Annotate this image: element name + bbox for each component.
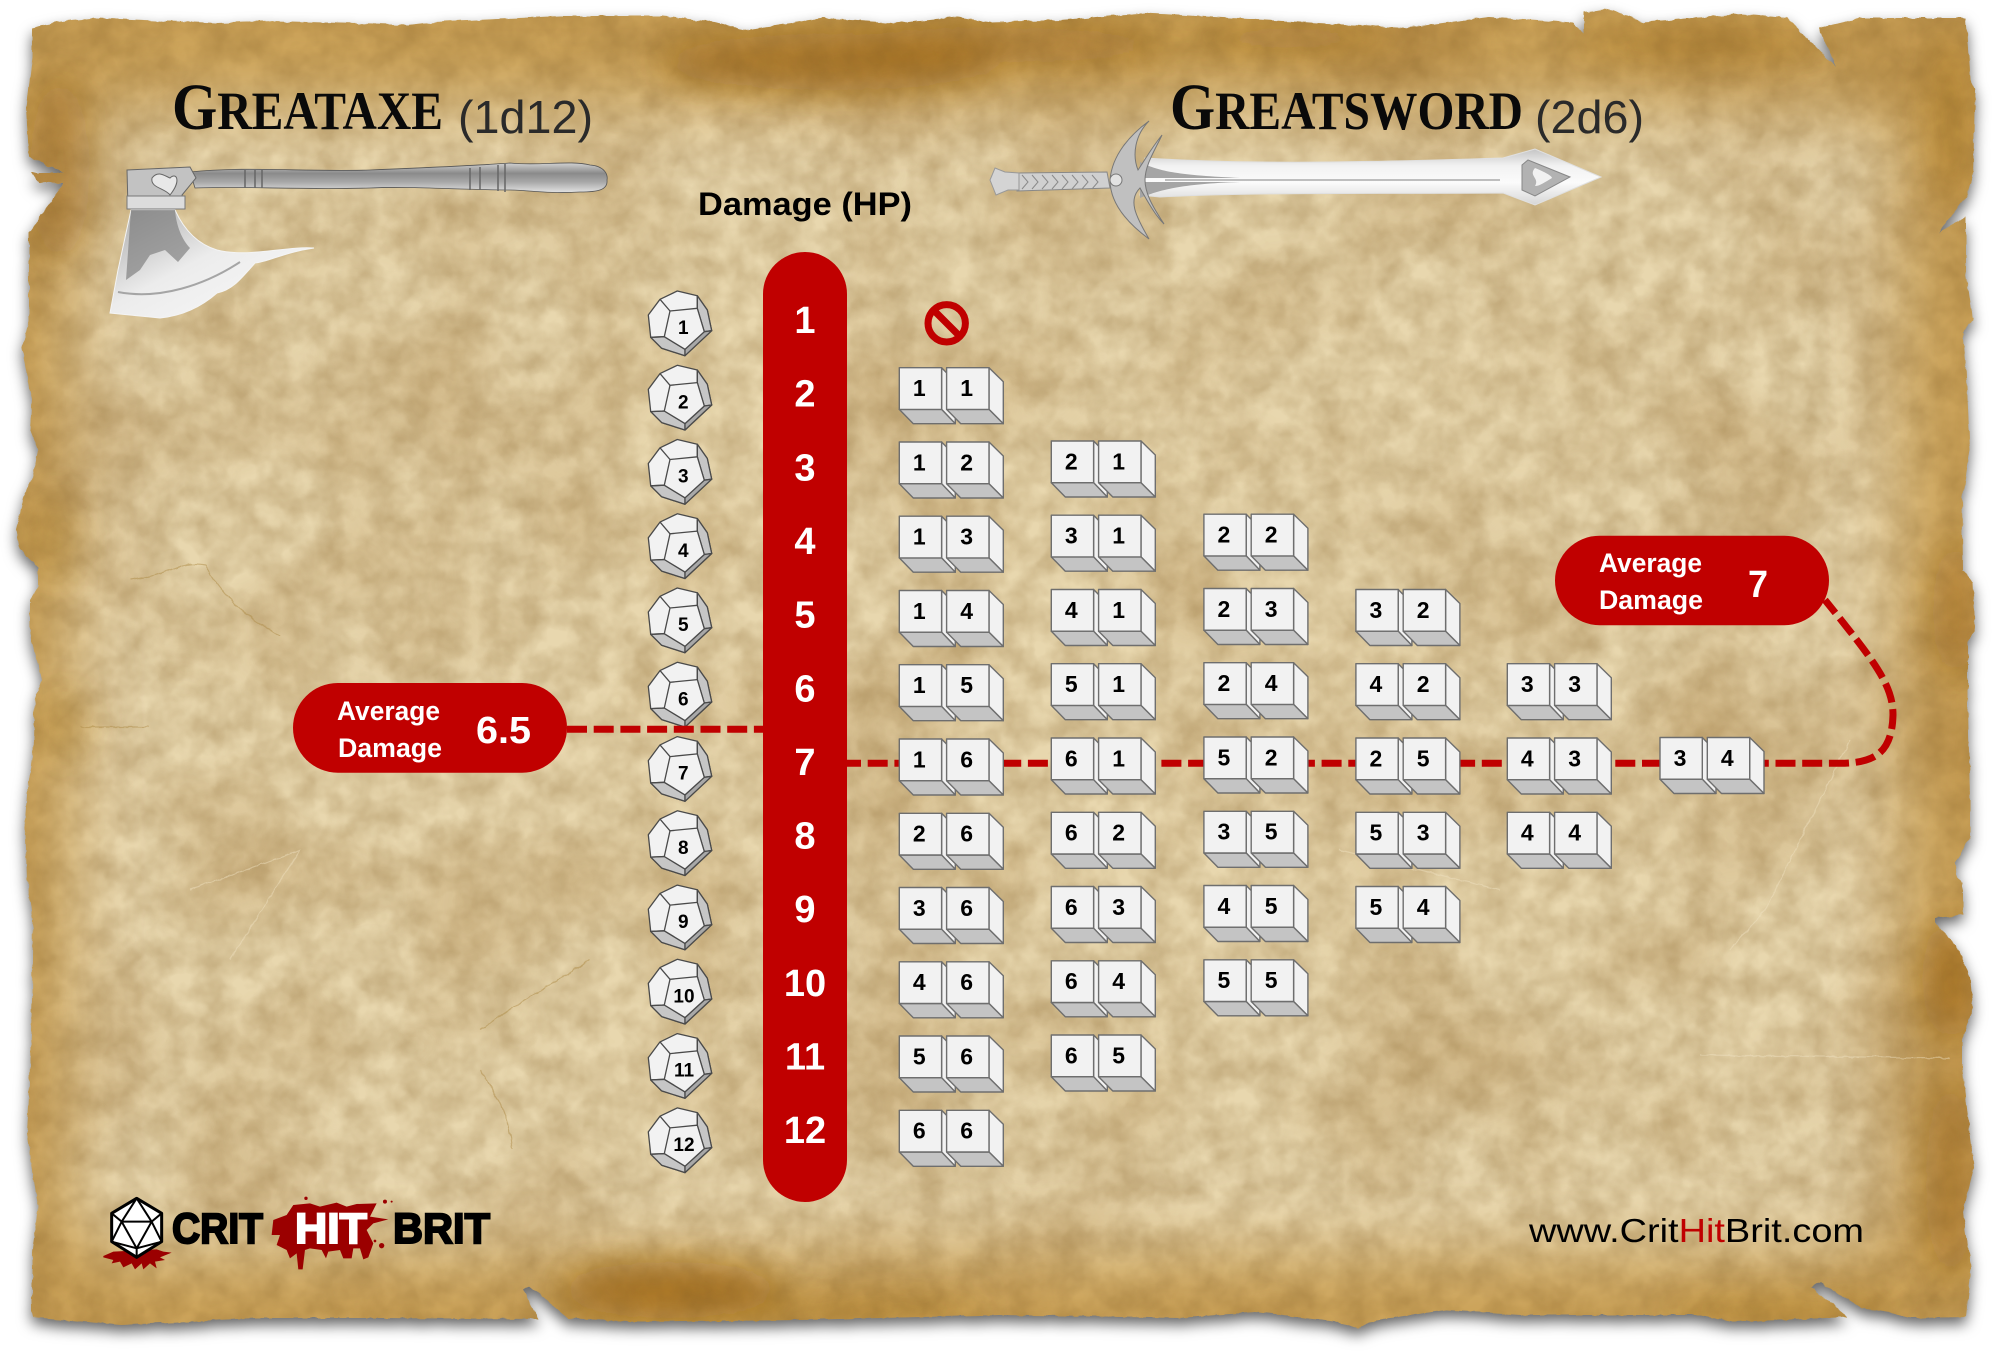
dice 6 2 — [1051, 812, 1155, 868]
d12 result 6 — [648, 662, 712, 727]
d12 result 11 — [648, 1034, 712, 1098]
dice 2 1 — [1051, 441, 1155, 497]
dice 4 2: 4 — [1370, 671, 1383, 697]
dice 4 3: 3 — [1568, 745, 1581, 771]
damage scale column: 5 — [794, 595, 816, 637]
d12 result 5: 5 — [678, 615, 689, 636]
dice 1 6: 1 — [913, 746, 926, 772]
dice 4 4: 4 — [1521, 820, 1534, 846]
dice 2 6 — [899, 813, 1003, 869]
dice 1 1: 1 — [913, 375, 926, 401]
d12 result 12 — [648, 1108, 712, 1173]
dice 5 4: 4 — [1417, 894, 1430, 920]
dice 2 1: 2 — [1065, 448, 1078, 474]
dice 1 2: 2 — [960, 449, 973, 475]
dice 4 4: 4 — [1568, 820, 1581, 846]
dice 4 6: 4 — [913, 969, 926, 995]
dice 3 3 — [1507, 664, 1611, 720]
dice 5 4 — [1356, 886, 1460, 942]
d12 result 12: 12 — [673, 1135, 695, 1156]
icon: greataxe — [110, 163, 607, 318]
dice 1 2: 1 — [913, 449, 926, 475]
d12 result 8 — [648, 811, 712, 876]
dice 6 6 — [899, 1110, 1003, 1166]
dice 1 1 — [899, 368, 1003, 424]
arrow: greatsword average connector — [847, 600, 1893, 763]
dice 3 1: 1 — [1112, 523, 1125, 549]
d12 result 3 — [648, 440, 712, 504]
logo: Crit Hit Brit: HIT — [295, 1205, 367, 1253]
dice 6 5 — [1051, 1035, 1155, 1091]
dice 2 6: 2 — [913, 821, 926, 847]
dice 5 1: 5 — [1065, 671, 1078, 697]
dice 3 6 — [899, 888, 1003, 944]
dice 2 2: 2 — [1218, 522, 1230, 548]
damage scale column: 2 — [794, 374, 816, 416]
dice 5 6 — [899, 1036, 1003, 1092]
dice 2 2: 2 — [1265, 522, 1278, 548]
dice 4 2 — [1356, 664, 1460, 720]
d12 result 9 — [648, 885, 712, 950]
dice 3 1: 3 — [1065, 523, 1078, 549]
dice 4 1: 1 — [1112, 597, 1125, 623]
dice 3 3: 3 — [1521, 671, 1534, 697]
dice 5 4: 5 — [1370, 894, 1383, 920]
d12 result 4: 4 — [678, 541, 689, 562]
dice 4 2: 2 — [1417, 671, 1430, 697]
dice 5 3: 3 — [1417, 820, 1430, 846]
d12 result 5 — [648, 588, 712, 653]
dice 4 5: 4 — [1218, 893, 1231, 919]
dice 6 5: 5 — [1112, 1042, 1125, 1068]
logo: Crit Hit Brit: CRIT — [172, 1205, 263, 1253]
dice 1 1: 1 — [960, 375, 973, 401]
dice 2 5 — [1356, 738, 1460, 794]
dice 4 4 — [1507, 812, 1611, 868]
greatsword dice column 5 — [1507, 664, 1611, 868]
dice 2 2 — [1204, 514, 1308, 570]
dice 3 5: 3 — [1218, 819, 1230, 845]
d12 result 10: 10 — [673, 986, 695, 1007]
dice 5 6: 6 — [960, 1043, 973, 1069]
d12 result 1: 1 — [678, 318, 689, 339]
dice 6 2: 6 — [1065, 820, 1078, 846]
d12 result 7: 7 — [678, 764, 689, 785]
callout: greatsword average damage: Average — [1599, 548, 1702, 578]
dice 1 2 — [899, 442, 1003, 498]
dice 1 3: 1 — [913, 524, 926, 550]
icon: greatsword — [990, 121, 1601, 239]
dice 3 4 — [1660, 738, 1764, 794]
dice 3 5: 5 — [1265, 819, 1278, 845]
title: greatsword: GREATSWORD — [1170, 71, 1523, 144]
dice 2 1: 1 — [1112, 448, 1125, 474]
logo: Crit Hit Brit — [103, 1197, 490, 1269]
d12 result 7 — [648, 737, 712, 801]
damage scale column: 9 — [794, 889, 816, 931]
damage scale column: 7 — [794, 742, 816, 784]
dice 6 1 — [1051, 738, 1155, 794]
damage scale column: 12 — [784, 1110, 826, 1152]
greatsword dice column 3 — [1204, 514, 1308, 1016]
dice 3 4: 4 — [1721, 745, 1734, 771]
damage scale column: 1 — [794, 300, 816, 342]
dice 5 1: 1 — [1112, 671, 1125, 697]
dice 5 5: 5 — [1265, 967, 1278, 993]
dice 4 1 — [1051, 590, 1155, 646]
dice 2 5: 5 — [1417, 745, 1430, 771]
dice 5 5: 5 — [1218, 967, 1231, 993]
damage scale column: 4 — [794, 521, 816, 563]
dice 1 4: 1 — [913, 598, 926, 624]
dice 6 2: 2 — [1112, 820, 1125, 846]
d12 result 3: 3 — [678, 466, 689, 488]
dice 6 1: 1 — [1112, 745, 1125, 771]
title: greatsword: (2d6) — [1535, 91, 1644, 143]
dice 3 2: 2 — [1417, 597, 1430, 623]
dice 1 6: 6 — [960, 746, 973, 772]
damage scale column: 6 — [794, 668, 816, 710]
dice 4 6 — [899, 962, 1003, 1018]
dice 3 6: 6 — [960, 895, 973, 921]
damage scale column: 11 — [785, 1036, 825, 1078]
dice 6 4 — [1051, 961, 1155, 1017]
callout: greatsword average damage: Damage — [1599, 585, 1703, 615]
title: greataxe: GREATAXE — [172, 71, 443, 144]
dice 4 3: 4 — [1521, 745, 1534, 771]
dice 6 6: 6 — [960, 1118, 973, 1144]
dice 5 5 — [1204, 960, 1308, 1016]
dice 1 6 — [899, 739, 1003, 795]
d12 result 10 — [648, 959, 712, 1024]
dice 6 4: 4 — [1112, 968, 1125, 994]
d12 result 8: 8 — [678, 838, 689, 859]
greatsword dice column 4 — [1356, 590, 1460, 942]
d12 result 2 — [648, 365, 712, 430]
dice 6 5: 6 — [1065, 1042, 1078, 1068]
damage scale column — [763, 252, 847, 1202]
damage scale column: 3 — [794, 447, 816, 489]
greatsword dice column 1 — [899, 368, 1003, 1166]
greatsword dice column 2 — [1051, 441, 1155, 1091]
logo: Crit Hit Brit: BRIT — [393, 1205, 490, 1253]
dice 1 3 — [899, 516, 1003, 572]
greataxe d12 column — [648, 291, 712, 1173]
dice 1 4: 4 — [960, 598, 973, 624]
dice 1 5: 1 — [913, 672, 926, 698]
dice 3 1 — [1051, 515, 1155, 571]
dice 3 2 — [1356, 590, 1460, 646]
callout: greatsword average damage — [1555, 536, 1829, 625]
dice 2 3 — [1204, 588, 1308, 644]
callout: greataxe average damage: Average — [337, 696, 440, 726]
dice 3 2: 3 — [1370, 597, 1382, 623]
dice 3 5 — [1204, 811, 1308, 867]
icon: not possible with 2d6 — [928, 305, 965, 342]
dice 2 3: 3 — [1265, 596, 1278, 622]
dice 2 5: 2 — [1370, 745, 1382, 771]
dice 6 4: 6 — [1065, 968, 1078, 994]
dice 6 6: 6 — [913, 1118, 926, 1144]
dice 6 1: 6 — [1065, 745, 1078, 771]
dice 6 3: 3 — [1112, 894, 1125, 920]
d12 result 1 — [648, 291, 712, 356]
d12 result 2: 2 — [678, 392, 689, 413]
dice 2 4: 4 — [1265, 670, 1278, 696]
dice 3 3: 3 — [1568, 671, 1581, 697]
callout: greatsword average damage: 7 — [1748, 564, 1768, 606]
dice 3 6: 3 — [913, 895, 926, 921]
damage scale column: 8 — [794, 816, 816, 858]
damage scale column: 10 — [784, 963, 826, 1005]
title: greataxe: (1d12) — [458, 91, 593, 143]
heading: damage axis: Damage (HP) — [698, 186, 912, 222]
dice 2 6: 6 — [960, 821, 973, 847]
dice 5 2: 2 — [1265, 744, 1278, 770]
dice 4 5 — [1204, 886, 1308, 942]
dice 6 3: 6 — [1065, 894, 1078, 920]
dice 4 1: 4 — [1065, 597, 1078, 623]
callout: greataxe average damage — [293, 683, 567, 773]
d12 result 9: 9 — [678, 912, 689, 933]
dice 5 2: 5 — [1218, 744, 1231, 770]
dice 6 3 — [1051, 886, 1155, 942]
dice 1 4 — [899, 590, 1003, 646]
d12 result 6: 6 — [678, 689, 689, 710]
dice 5 3: 5 — [1370, 820, 1383, 846]
callout: greataxe average damage: 6.5 — [476, 710, 531, 752]
dice 1 5 — [899, 665, 1003, 721]
d12 result 11: 11 — [674, 1061, 694, 1082]
dice 1 3: 3 — [960, 524, 973, 550]
dice 5 3 — [1356, 812, 1460, 868]
website url: www.Crit HitBrit.com — [1528, 1212, 1864, 1249]
dice 5 6: 5 — [913, 1043, 926, 1069]
arrow: greataxe average connector — [567, 726, 763, 733]
dice 5 1 — [1051, 664, 1155, 720]
dice 4 5: 5 — [1265, 893, 1278, 919]
d12 result 4 — [648, 514, 712, 578]
dice 5 2 — [1204, 737, 1308, 793]
dice 1 5: 5 — [960, 672, 973, 698]
dice 2 4 — [1204, 663, 1308, 719]
callout: greataxe average damage: Damage — [338, 733, 442, 763]
dice 4 6: 6 — [960, 969, 973, 995]
dice 3 4: 3 — [1674, 745, 1686, 771]
dice 2 4: 2 — [1218, 670, 1230, 696]
dice 2 3: 2 — [1218, 596, 1230, 622]
dice 4 3 — [1507, 738, 1611, 794]
